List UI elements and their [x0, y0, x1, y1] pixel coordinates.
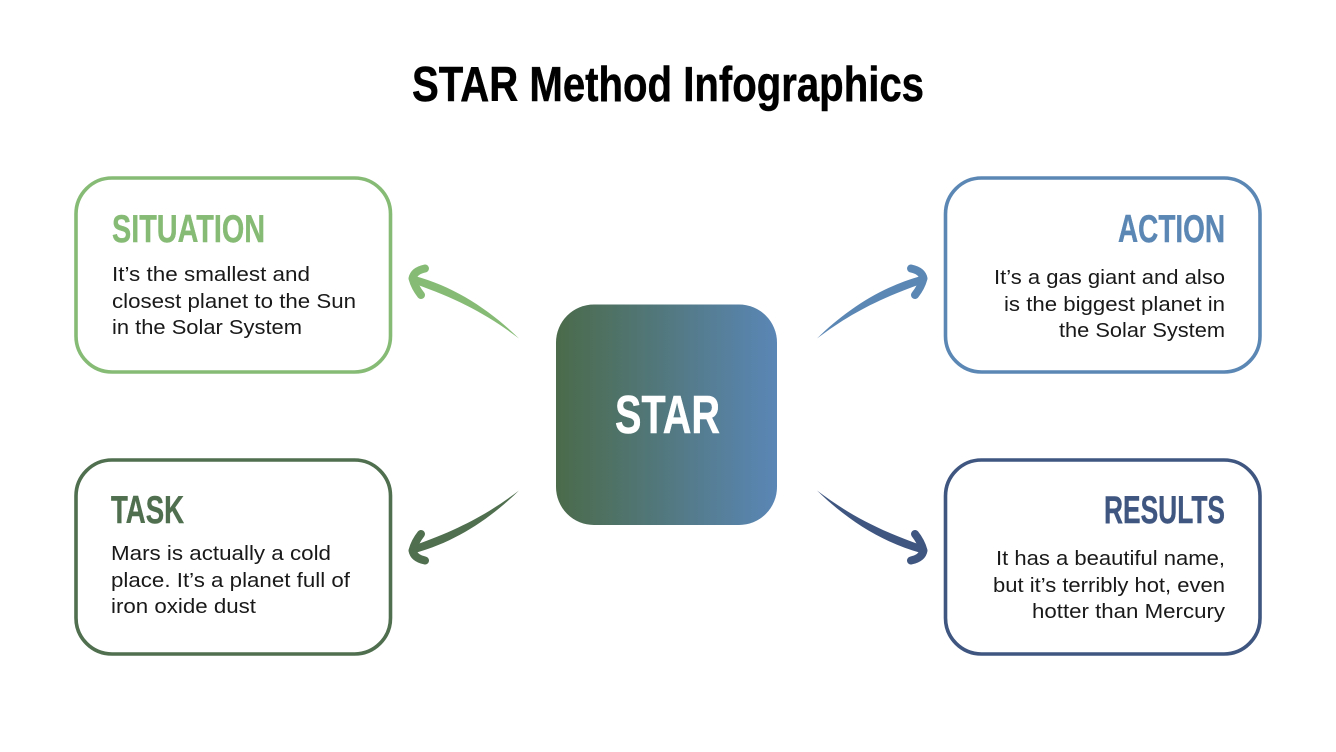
- arrow: to action: [817, 268, 924, 338]
- text: results description: [993, 547, 1226, 623]
- arrow: to situation: [412, 268, 519, 338]
- arrow: to results: [817, 490, 924, 560]
- heading: action: ACTION: [1118, 208, 1225, 251]
- text: task description: place. It’s a planet full of: [111, 569, 350, 592]
- panel: situation: [76, 178, 390, 372]
- text: action description: It’s a gas giant and also: [994, 266, 1225, 289]
- heading: task: TASK: [111, 489, 184, 532]
- heading: situation: SITUATION: [112, 208, 265, 251]
- text: task description: Mars is actually a cold: [111, 542, 331, 565]
- text: situation description: closest planet to the Sun: [112, 290, 356, 313]
- center label: STAR: [615, 385, 720, 445]
- text: situation description: It’s the smallest and: [112, 263, 310, 286]
- text: results description: It has a beautiful name,: [996, 547, 1225, 570]
- panel: task: [76, 460, 390, 654]
- text: action description: is the biggest planet in: [1004, 293, 1225, 316]
- center block: STAR: [556, 304, 777, 525]
- text: situation description: in the Solar System: [112, 316, 302, 339]
- text: task description: [111, 542, 350, 618]
- heading: results: RESULTS: [1104, 489, 1225, 532]
- text: results description: hotter than Mercury: [1032, 600, 1226, 623]
- text: task description: iron oxide dust: [111, 595, 256, 618]
- text: action description: [994, 266, 1225, 342]
- text: action description: the Solar System: [1059, 319, 1225, 342]
- title: STAR Method Infographics: [412, 58, 924, 112]
- panel: results: [946, 460, 1260, 654]
- text: situation description: [112, 263, 356, 339]
- panel: action: [946, 178, 1260, 372]
- text: results description: but it’s terribly hot, even: [993, 574, 1225, 597]
- arrow: to task: [412, 490, 519, 560]
